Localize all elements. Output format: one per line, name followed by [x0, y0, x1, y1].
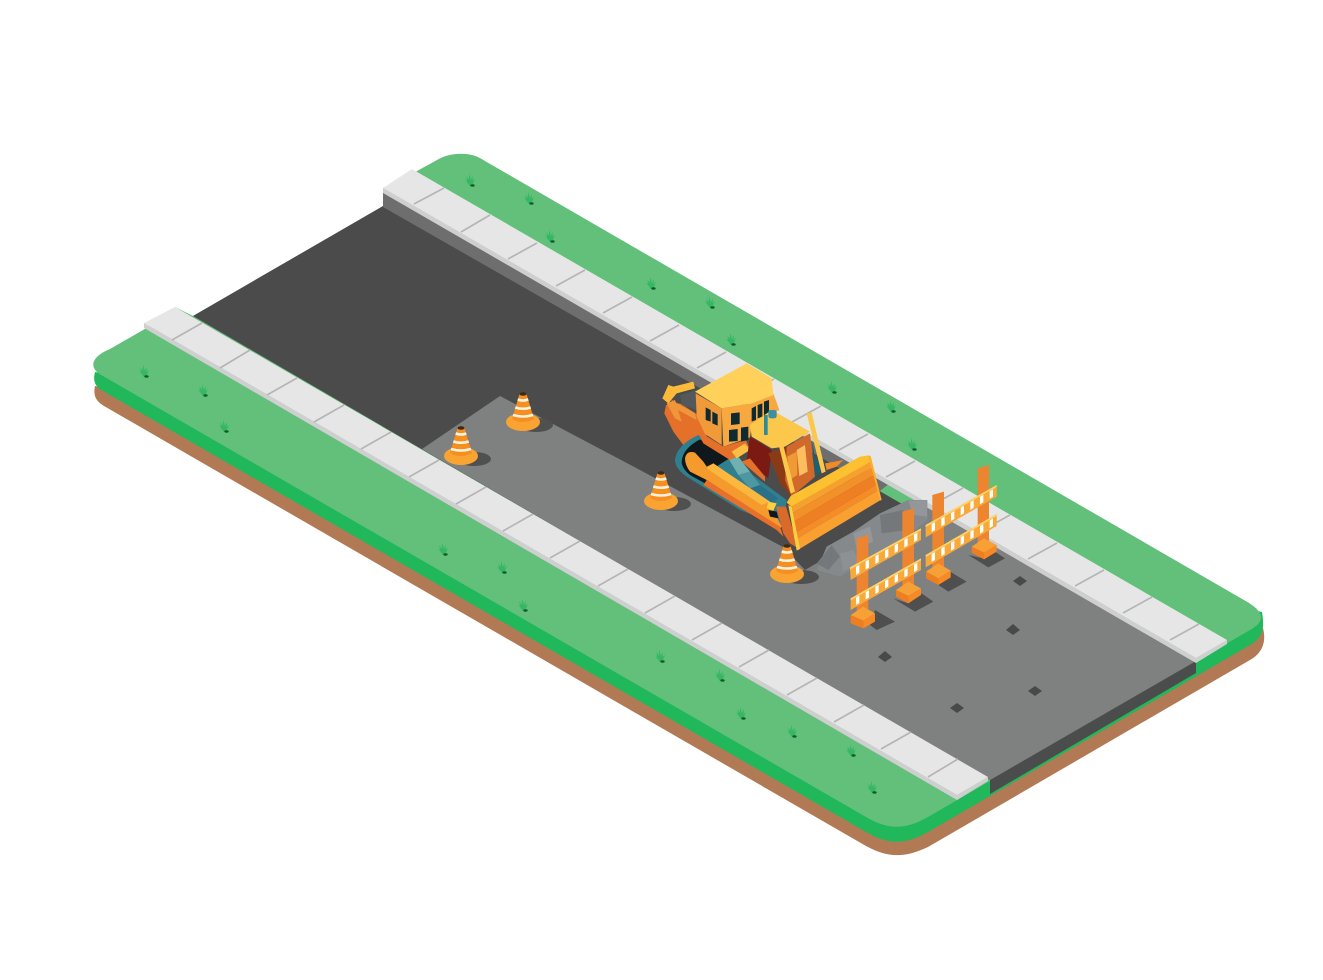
barricade front [850, 508, 921, 628]
left curb [144, 307, 988, 800]
grass side layer [94, 372, 1263, 842]
barricade shadows [870, 552, 1005, 630]
rubble pile [817, 500, 927, 577]
curb retaining wall [383, 190, 890, 491]
bulldozer [662, 363, 882, 551]
blade push arms [775, 413, 843, 493]
grass top [93, 154, 1261, 827]
excavated dark asphalt [193, 206, 1196, 780]
exhaust pipe [764, 410, 777, 435]
engine hood [742, 410, 823, 497]
rear ripper [662, 382, 708, 445]
dozer blade [776, 455, 882, 551]
finished grey asphalt [422, 396, 1196, 780]
track frame [685, 452, 783, 537]
soil layer [94, 386, 1264, 855]
potholes [878, 576, 1042, 713]
grass tufts [138, 174, 917, 794]
crawler track [675, 435, 787, 527]
cone far [506, 392, 553, 432]
cab [695, 363, 779, 460]
road surface [193, 190, 1196, 794]
ground slab [93, 154, 1264, 855]
cone middle [644, 471, 691, 511]
cone front of bulldozer [770, 544, 819, 584]
cab windows [706, 400, 769, 442]
barricade back [926, 465, 997, 585]
right curb [383, 169, 1227, 663]
road end cut face [990, 661, 1196, 794]
barricades [850, 465, 1005, 630]
cone left [444, 426, 491, 466]
